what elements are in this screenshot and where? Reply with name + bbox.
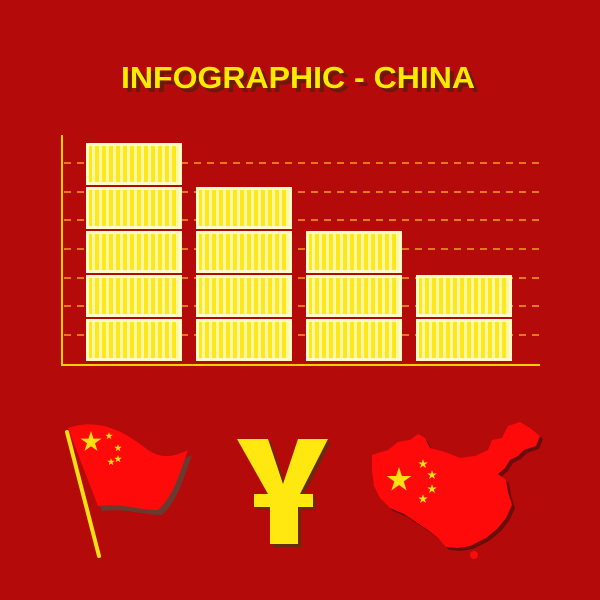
bar chart bbox=[61, 135, 540, 366]
title: INFOGRAPHIC - CHINA bbox=[121, 60, 475, 95]
icon: yuan sign bbox=[237, 439, 331, 547]
icon: map of China bbox=[372, 422, 543, 559]
title: INFOGRAPHIC - CHINA bbox=[125, 64, 479, 99]
icon: flag bbox=[67, 424, 192, 556]
